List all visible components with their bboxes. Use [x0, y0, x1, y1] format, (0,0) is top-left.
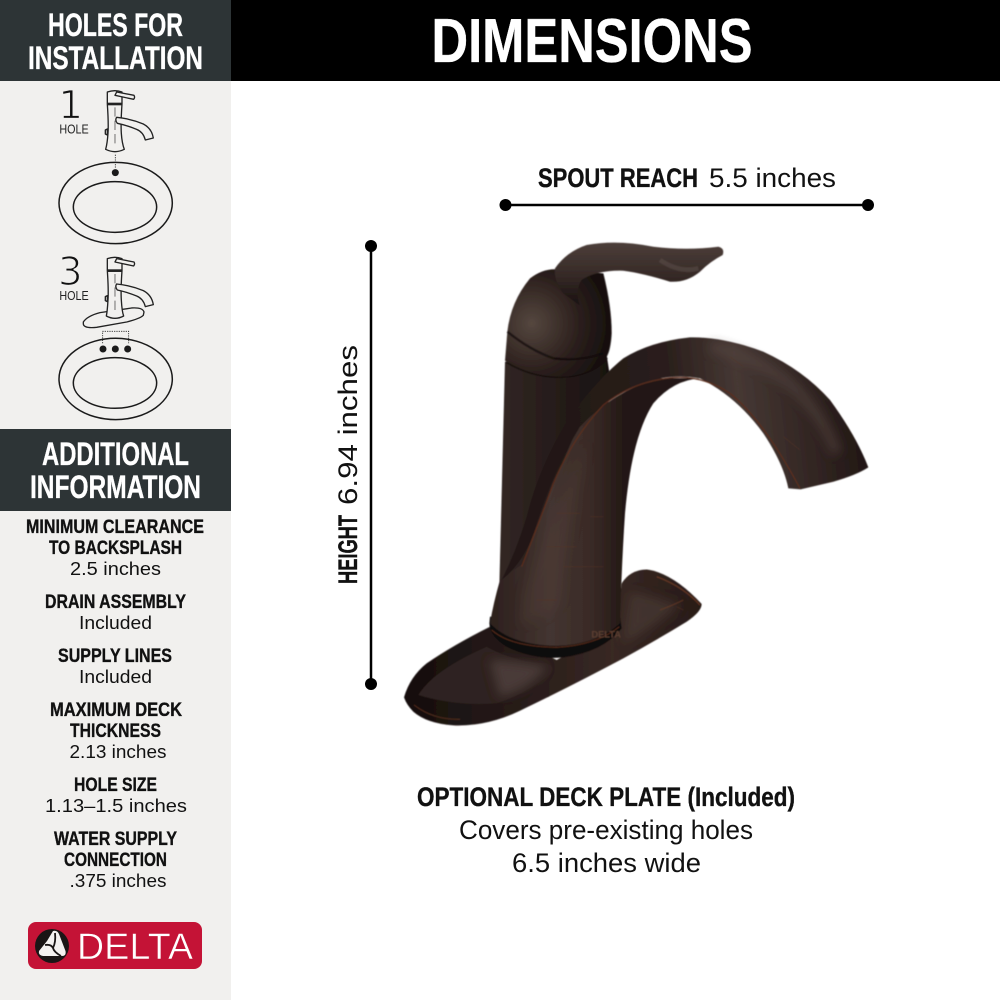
callout: optional deck plate: 6.5 inches wide: [512, 848, 701, 878]
spec list: 1.13–1.5 inches: [45, 796, 187, 816]
spout and taper band: [502, 337, 868, 580]
dimension: height: [333, 240, 377, 690]
spout sheen: [710, 347, 837, 453]
spec list: Included: [79, 667, 152, 687]
spec list: DRAIN ASSEMBLY: [45, 592, 186, 613]
diagram: one hole installation: HOLE: [59, 121, 89, 136]
spec list: TO BACKSPLASH: [49, 538, 182, 559]
callout: optional deck plate: [417, 782, 795, 878]
brushed streaks: [537, 357, 800, 610]
dimension: height: HEIGHT: [333, 515, 363, 584]
title banner: dimensions: DIMENSIONS: [432, 7, 752, 76]
spec list: HOLE SIZE: [74, 775, 157, 796]
header: holes for installation: INSTALLATION: [28, 40, 203, 76]
header: additional information: [0, 429, 231, 511]
diagram: one hole installation: 1: [58, 83, 83, 128]
diagram: one hole installation: [58, 83, 172, 244]
faucet photo: [404, 243, 868, 725]
logo mark on base: DELTA: [591, 629, 621, 639]
dimension: spout reach: SPOUT REACH: [538, 163, 698, 193]
dimension: height: 6.94 inches: [333, 345, 363, 505]
spout arch seam: [522, 377, 800, 567]
diagram: three hole installation: [58, 250, 172, 420]
lower body sheen: [520, 443, 587, 623]
spec list: .375 inches: [70, 871, 166, 891]
diagram: three hole installation: 3: [58, 250, 83, 295]
spec list: 2.5 inches: [70, 559, 161, 579]
spec list: WATER SUPPLY: [54, 829, 177, 850]
valve cylinder: [499, 355, 610, 587]
spec list: MINIMUM CLEARANCE: [26, 517, 204, 538]
logo: delta: [28, 922, 202, 969]
spec list: SUPPLY LINES: [58, 646, 172, 667]
callout: optional deck plate: Covers pre-existing holes: [459, 815, 753, 845]
spec list: 2.13 inches: [70, 742, 166, 762]
header: additional information: INFORMATION: [30, 469, 201, 505]
logo: delta: DELTA: [77, 925, 193, 967]
dimension: spout reach: 5.5 inches: [709, 163, 836, 193]
header: additional information: ADDITIONAL: [42, 436, 189, 472]
spec list: CONNECTION: [64, 850, 167, 871]
spec list: THICKNESS: [70, 721, 161, 742]
header: holes for installation: [0, 0, 231, 81]
header: holes for installation: HOLES FOR: [48, 7, 183, 43]
spec list: MAXIMUM DECK: [50, 700, 182, 721]
dimension: spout reach: [500, 163, 874, 211]
lower body: [490, 378, 700, 646]
sidebar panel: [0, 0, 231, 1000]
deck plate: [404, 569, 702, 725]
diagram: three hole installation: HOLE: [59, 288, 89, 303]
spec list: Included: [79, 613, 152, 633]
lever cap: [505, 269, 612, 377]
base ring: [489, 617, 622, 658]
lever handle: [555, 243, 723, 305]
spec list: [26, 517, 204, 891]
title banner: dimensions: [231, 0, 1000, 81]
callout: optional deck plate: OPTIONAL DECK PLATE (Included): [417, 782, 795, 812]
